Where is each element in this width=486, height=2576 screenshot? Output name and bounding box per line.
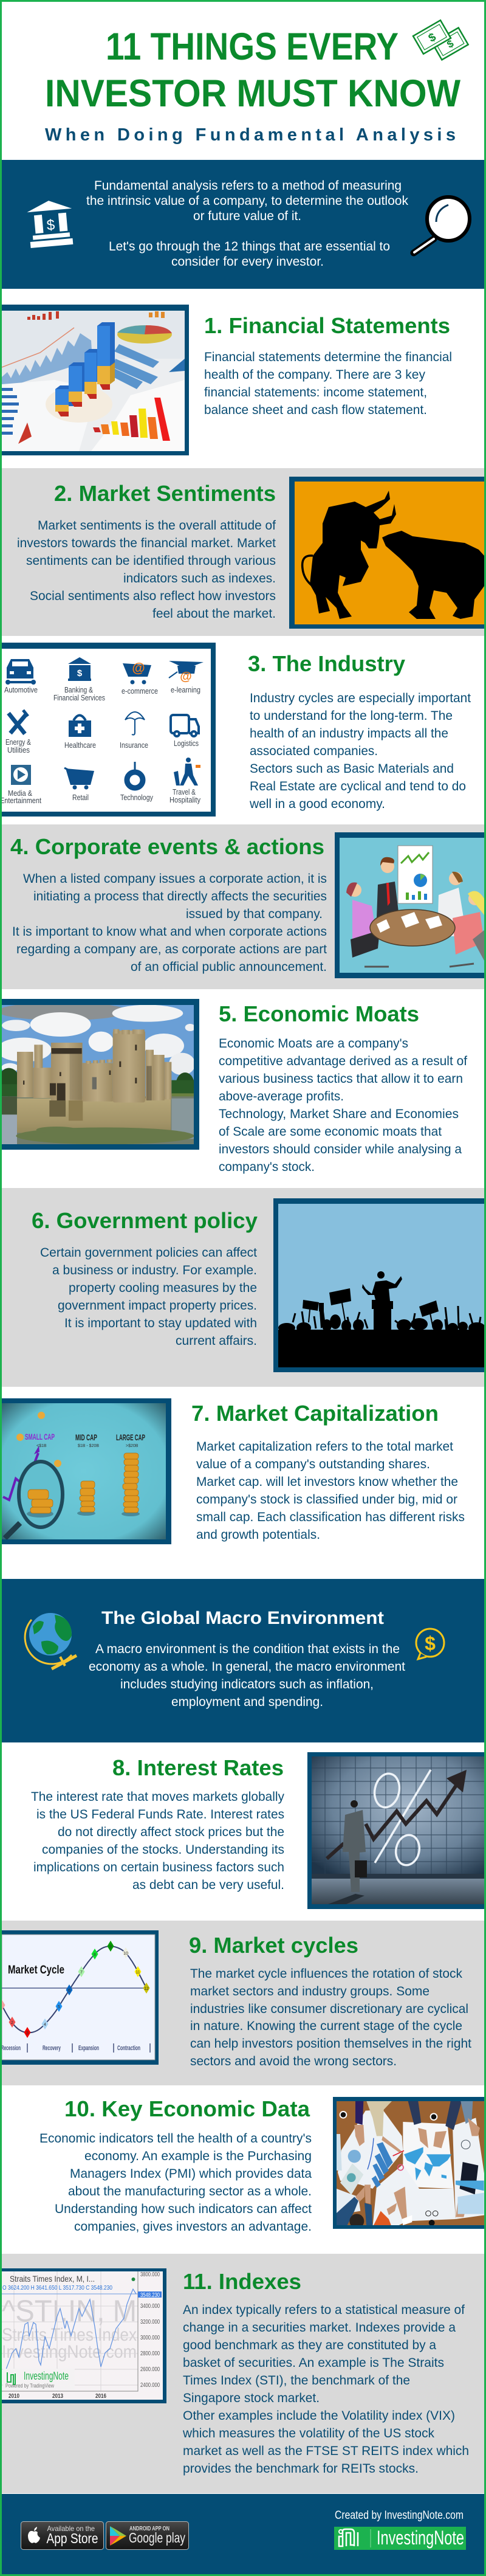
button: App Store: Available on the <box>47 2524 95 2533</box>
image: Straits Times Index chart: O 3624.200 H 3641.650 L 3517.730 C 3548.230 <box>2 2284 112 2291</box>
image: market cycle chart: Contraction <box>117 2045 140 2052</box>
body text: investors should consider while analysing a <box>219 1142 462 1156</box>
body text <box>89 1642 405 1709</box>
heading: The Global Macro Environment <box>101 1608 384 1628</box>
heading: 2. Market Sentiments <box>54 481 276 506</box>
intro text: Let's go through the 12 things that are essential to <box>109 239 390 254</box>
title <box>45 26 460 115</box>
image: industry icons: Technology <box>120 793 154 802</box>
image: industry icons: Travel & <box>173 788 196 796</box>
body text: government impact property prices. <box>58 1298 257 1313</box>
image: industry icons: Media & <box>8 789 33 798</box>
image: industry icons: Entertainment <box>0 796 41 805</box>
body text: can help investors position themselves in the right <box>190 2036 471 2051</box>
image: Straits Times Index chart: 2016 <box>95 2392 106 2400</box>
image: market cycle chart: 2 <box>11 2021 13 2025</box>
body text: Singapore stock market. <box>183 2391 320 2405</box>
image: Straits Times Index chart: 2600.000 <box>140 2366 160 2373</box>
body text: about the manufacturing sector as a whole. <box>68 2184 312 2198</box>
title: INVESTOR MUST KNOW <box>45 72 460 115</box>
panel: 1 financial statements <box>2 305 452 455</box>
body text <box>182 2302 469 2476</box>
body text: An index typically refers to a statistical measure of <box>183 2302 465 2317</box>
body text: indicators such as indexes. <box>123 571 276 585</box>
image: man facing percent chart <box>307 1752 484 1909</box>
heading: 4. Corporate events & actions <box>10 834 324 859</box>
body text: market sectors and industry groups. Some <box>190 1984 430 1998</box>
footer <box>2 2494 484 2574</box>
image: market cycle chart: 4 <box>44 2023 46 2027</box>
icon: bank <box>26 199 75 248</box>
body text: good benchmark as they are constituted by a <box>183 2338 436 2352</box>
body text: is the US Federal Funds Rate. Interest rates <box>36 1807 284 1822</box>
body text: property cooling measures by the <box>69 1280 257 1295</box>
body text: above-average profits. <box>219 1089 344 1103</box>
body text <box>219 1036 467 1174</box>
body text: to understand for the long-term. The <box>250 708 453 723</box>
icon: banking: $ <box>77 668 83 679</box>
intro text: consider for every investor. <box>171 254 324 269</box>
image: business meeting illustration <box>335 832 484 978</box>
panel: 7 market capitalization <box>2 1398 465 1544</box>
body text: Managers Index (PMI) which provides data <box>70 2166 312 2181</box>
image: industry icons <box>0 643 216 817</box>
icon: e-learning <box>169 661 204 683</box>
body text: feel about the market. <box>152 606 276 621</box>
body text: regarding a company are, as corporate actions are part <box>16 942 327 956</box>
image: Straits Times Index chart: InvestingNote <box>24 2370 69 2382</box>
image: industry icons: Banking & <box>64 686 94 694</box>
image: market cycle chart: Recession <box>1 2045 21 2052</box>
body text: Other examples include the Volatility index (VIX) <box>183 2408 455 2423</box>
image: market cap coins: LARGE CAP <box>116 1432 145 1442</box>
panel: 10 key economic data <box>39 2096 486 2234</box>
body text: of Scale are some economic moats that <box>219 1124 442 1139</box>
image: industry icons: Insurance <box>120 741 148 750</box>
image: market cycle chart: 3 <box>26 2031 29 2036</box>
icon: bank: $ <box>46 216 55 234</box>
panel: the global macro environment <box>2 1579 484 1742</box>
body text: initiating a process that directly affects the securities <box>33 889 327 903</box>
icon: dollar speech bubble <box>416 1629 444 1659</box>
body text: health of an industry impacts all the <box>250 726 448 741</box>
body text: a business or industry. For example. <box>52 1263 257 1277</box>
body text: economy as a whole. In general, the macro environment <box>89 1659 405 1674</box>
panel: 9 market cycles <box>0 1921 484 2085</box>
image: industry icons: Financial Services <box>53 694 105 702</box>
image: market cap coins: <$1B <box>36 1444 47 1448</box>
body text: competitive advantage derived as a result of <box>219 1054 467 1068</box>
body text: industries like consumer discretionary are cyclical <box>190 2001 468 2016</box>
body text: sentiments can be identified through various <box>26 553 276 568</box>
image: market cycle chart: Recovery <box>43 2045 61 2052</box>
image: market cycle chart: 6 <box>68 1989 70 1993</box>
button: Google play: ANDROID APP ON <box>129 2525 169 2532</box>
body text: Times Index (STI), the benchmark of the <box>183 2373 410 2388</box>
image: Straits Times Index chart: 3800.000 <box>140 2271 160 2278</box>
image: market cap coins: >$20B <box>126 1444 139 1448</box>
icon: travel <box>174 758 200 786</box>
panel: introduction <box>2 160 484 289</box>
image: industry icons: Automotive <box>4 686 38 694</box>
image: market cycle chart: 10 <box>123 1952 128 1956</box>
body text: small cap. Each classification has different risks <box>196 1510 465 1524</box>
button: App Store: App Store <box>46 2530 98 2546</box>
body text: Real Estate are cyclical and tend to do <box>250 779 466 793</box>
body text <box>39 2131 312 2234</box>
icon: banknotes: $ <box>426 30 439 45</box>
image: industry icons: Healthcare <box>64 741 96 750</box>
body text <box>249 691 471 811</box>
heading: 11. Indexes <box>183 2269 301 2294</box>
body text: of an official public announcement. <box>131 959 327 974</box>
icon: globe <box>25 1613 77 1669</box>
body text: provides the benchmark for REITs stocks. <box>183 2461 419 2476</box>
intro text: or future value of it. <box>193 209 301 223</box>
body text: various business tactics that allow it to earn <box>219 1071 463 1086</box>
heading: 1. Financial Statements <box>204 313 450 338</box>
button: App Store <box>21 2522 103 2550</box>
image: Straits Times Index chart: 3548.230 <box>140 2292 160 2299</box>
icon: e-learning: @ <box>180 670 192 683</box>
image: industry icons: Retail <box>72 793 89 802</box>
image: Straits Times Index chart: 2013 <box>52 2392 63 2400</box>
image: Straits Times Index chart <box>2 2268 166 2403</box>
image: market cycle chart: 8 <box>94 1953 96 1957</box>
image: Straits Times Index chart: 3000.000 <box>140 2335 160 2341</box>
body text <box>196 1439 465 1542</box>
icon: e-commerce: @ <box>132 660 145 675</box>
heading: 10. Key Economic Data <box>64 2096 310 2121</box>
body text <box>190 1966 471 2068</box>
image: market cap coins: SMALL CAP <box>25 1432 55 1442</box>
icon: banking <box>68 657 91 681</box>
body text: includes studying indicators such as inflation, <box>120 1677 374 1691</box>
image: crowd and speaker silhouette <box>273 1198 485 1372</box>
body text: do not directly affect stock prices but the <box>58 1825 284 1839</box>
icon: e-commerce <box>123 663 151 685</box>
image: industry icons: Energy & <box>5 738 32 747</box>
image: Straits Times Index chart: Straits Times Index <box>2 2325 137 2345</box>
body text <box>17 518 276 621</box>
heading: 6. Government policy <box>32 1208 258 1233</box>
image: Straits Times Index chart: Straits Times Index, M, I... <box>10 2274 95 2284</box>
body text: well in a good economy. <box>249 796 385 811</box>
InvestingNote logo <box>334 2527 466 2550</box>
body text: Certain government policies can affect <box>40 1245 257 1260</box>
icon: technology <box>127 762 143 788</box>
body text: issued by that company. <box>186 906 323 921</box>
image: Straits Times Index chart: 3400.000 <box>140 2303 160 2310</box>
body text: implications on certain business factors such <box>33 1860 284 1874</box>
body text: economy. An example is the Purchasing <box>84 2149 312 2163</box>
image: market cycle chart: 9 <box>109 1945 112 1949</box>
image: industry icons: e-learning <box>171 686 200 694</box>
body text: When a listed company issues a corporate action, it is <box>23 871 327 886</box>
panel: 8 interest rates <box>31 1752 484 1909</box>
image: market cap coins: MID CAP <box>75 1432 97 1442</box>
body text: Economic indicators tell the health of a country's <box>39 2131 312 2146</box>
panel: 5 economic moats <box>0 999 467 1174</box>
button: Google play <box>106 2522 188 2550</box>
image: Straits Times Index chart: 3200.000 <box>140 2319 160 2326</box>
heading: 3. The Industry <box>248 651 405 676</box>
body text: sectors and avoid the wrong sectors. <box>190 2054 397 2068</box>
body text: Market cap. will let investors know whether the <box>196 1474 458 1489</box>
image: Straits Times Index chart: 2010 <box>9 2392 19 2400</box>
body text: Market sentiments is the overall attitude of <box>38 518 276 533</box>
body text: and growth potentials. <box>196 1527 320 1542</box>
title: 11 THINGS EVERY <box>106 26 399 68</box>
body text: which measures the volatility of the US stock <box>182 2426 434 2440</box>
image: industry icons: Utilities <box>7 746 30 754</box>
body text: basket of securities. An example is The Straits <box>183 2355 444 2370</box>
body text: companies of the stocks. Understanding its <box>42 1842 284 1857</box>
body text: Financial statements determine the financial <box>204 350 452 364</box>
body text: Social sentiments also reflect how investors <box>30 589 276 603</box>
body text <box>204 350 452 417</box>
image: market cycle chart: 12 <box>144 1987 149 1991</box>
panel: 6 government policy <box>2 1188 485 1387</box>
image: team around table with world map <box>333 2097 486 2229</box>
body text: The market cycle influences the rotation of stock <box>190 1966 462 1981</box>
image: Straits Times Index chart: ^STI.IN, M <box>2 2294 137 2328</box>
icon: magnifying glass <box>414 197 470 253</box>
heading: 7. Market Capitalization <box>191 1401 439 1426</box>
header <box>45 20 468 145</box>
icon: dollar speech bubble: $ <box>425 1632 436 1654</box>
panel: 11 indexes <box>2 2254 484 2493</box>
body text: Economic Moats are a company's <box>219 1036 408 1051</box>
image: market cap coins: $1B - $20B <box>78 1444 99 1448</box>
image: industry icons: Hospitality <box>169 796 201 804</box>
icon: banknotes: $ <box>445 38 456 50</box>
body text: Sectors such as Basic Materials and <box>250 761 454 776</box>
panel: 2 market sentiments <box>2 468 484 636</box>
image: Straits Times Index chart: InvestingNote.com <box>2 2342 137 2362</box>
panel: 4 corporate events and actions <box>2 824 484 989</box>
image: castle and moat <box>0 999 199 1150</box>
body text: health of the company. There are 3 key <box>204 367 425 382</box>
chart label: Market Cycle <box>8 1964 64 1977</box>
body text: The interest rate that moves markets globally <box>31 1789 284 1804</box>
body text: Industry cycles are especially important <box>250 691 471 705</box>
icon: banknotes <box>413 20 468 60</box>
body text <box>40 1245 257 1348</box>
image: industry icons: e-commerce <box>122 687 158 696</box>
image: market cycle chart: 7 <box>80 1970 83 1975</box>
credit text: Created by InvestingNote.com <box>335 2509 464 2522</box>
button: Google play: Google play <box>129 2530 185 2546</box>
image: Straits Times Index chart: 2800.000 <box>140 2350 160 2357</box>
image: financial charts <box>2 305 189 455</box>
intro text: the intrinsic value of a company, to determine the outlook <box>86 193 408 208</box>
body text: A macro environment is the condition that exists in the <box>95 1642 400 1656</box>
image: market cycle chart: 11 <box>135 1970 140 1975</box>
body text: It is important to know what and when corporate actions <box>12 924 327 939</box>
image: Straits Times Index chart: Powered by TradingView <box>5 2383 54 2389</box>
image: market cap coins <box>2 1398 171 1544</box>
image: bull and bear <box>289 477 484 629</box>
intro text: Fundamental analysis refers to a method of measuring <box>94 178 402 193</box>
heading: 9. Market cycles <box>189 1933 358 1958</box>
image: Straits Times Index chart: 2400.000 <box>140 2382 160 2389</box>
heading: 5. Economic Moats <box>219 1001 419 1026</box>
icon: healthcare <box>69 715 91 737</box>
icon: automotive <box>5 659 36 685</box>
body text: company's stock. <box>219 1159 315 1174</box>
icon: retail <box>64 768 94 789</box>
body text: associated companies. <box>250 744 378 758</box>
icon: logistics <box>171 715 199 736</box>
icon: media <box>11 765 31 785</box>
body text <box>31 1789 284 1892</box>
body text <box>12 871 327 974</box>
image: market cycle chart <box>0 1930 159 2065</box>
body text: employment and spending. <box>171 1694 323 1709</box>
body text: value of a company's outstanding shares. <box>196 1457 430 1471</box>
image: market cycle chart: 5 <box>58 2005 60 2009</box>
body text: financial statements: income statement, <box>204 385 427 399</box>
body text: current affairs. <box>176 1333 257 1348</box>
icon: insurance <box>125 712 145 735</box>
body text: Technology, Market Share and Economies <box>219 1107 459 1121</box>
body text: change in a securities market. Indexes provide a <box>183 2320 456 2335</box>
body text: company's stock is classified under big, mid or <box>196 1492 457 1507</box>
body text: as debt can be very useful. <box>132 1877 284 1892</box>
body text: Market capitalization refers to the total market <box>196 1439 453 1454</box>
subtitle: When Doing Fundamental Analysis <box>45 125 456 145</box>
body text: It is important to stay updated with <box>64 1316 257 1330</box>
intro text <box>86 178 408 269</box>
body text: Understanding how such indicators can affect <box>55 2201 312 2216</box>
body text: market as well as the FTSE ST REITS index which <box>183 2443 469 2458</box>
image: industry icons: Logistics <box>174 739 199 748</box>
icon: energy and utilities <box>9 710 28 734</box>
heading: 8. Interest Rates <box>112 1755 284 1780</box>
body text: companies, gives investors an advantage. <box>74 2219 312 2234</box>
body text: in nature. Knowing the current stage of the cycle <box>190 2018 462 2033</box>
image: market cycle chart: Expansion <box>78 2045 99 2052</box>
body text: investors towards the financial market. Market <box>17 536 276 550</box>
panel: 3 the industry <box>0 643 471 817</box>
body text: balance sheet and cash flow statement. <box>204 402 427 417</box>
